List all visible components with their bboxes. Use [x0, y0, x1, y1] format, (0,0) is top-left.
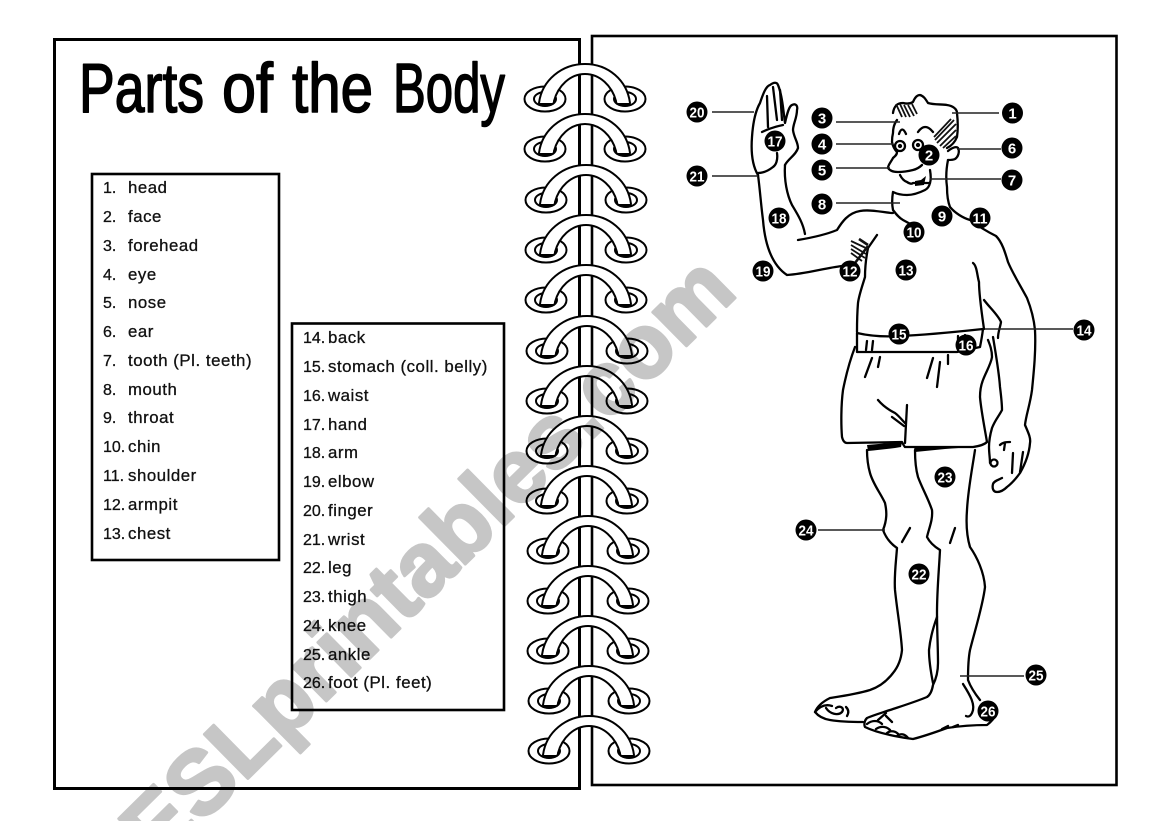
panel: vocabulary list 1 to 13: 1. [103, 180, 116, 197]
number badges: 26 [980, 704, 996, 720]
panel: vocabulary list 1 to 13: 4. [103, 267, 116, 284]
panel: vocabulary list 14 to 26: 25. [303, 647, 325, 664]
panel: vocabulary list 14 to 26: ankle [328, 645, 371, 664]
panel: vocabulary list 14 to 26: leg [328, 558, 352, 577]
panel: vocabulary list 14 to 26: 18. [303, 445, 325, 462]
panel: vocabulary list 1 to 13: 12. [103, 497, 125, 514]
panel: vocabulary list 1 to 13: 13. [103, 526, 125, 543]
panel: vocabulary list 14 to 26: 20. [303, 503, 325, 520]
panel: vocabulary list 1 to 13: face [128, 207, 162, 226]
toes [815, 705, 848, 716]
panel: vocabulary list 14 to 26: 17. [303, 417, 325, 434]
torso [857, 235, 877, 332]
title: of [222, 49, 273, 127]
panel: vocabulary list 14 to 26: knee [328, 616, 367, 635]
number badges: 25 [1028, 668, 1044, 684]
title: Body [393, 49, 505, 127]
panel: vocabulary list 1 to 13: 8. [103, 382, 116, 399]
number badges: 9 [938, 208, 946, 226]
title: the [292, 49, 373, 127]
raised arm [785, 165, 805, 234]
panel: vocabulary list 1 to 13: ear [128, 322, 154, 341]
panel: vocabulary list 14 to 26: 15. [303, 359, 325, 376]
panel: vocabulary list 14 to 26: wrist [327, 530, 365, 549]
panel: vocabulary list 14 to 26: 24. [303, 618, 325, 635]
raised hand [752, 83, 798, 175]
number badges: 17 [768, 134, 782, 150]
panel: vocabulary list 1 to 13: 7. [103, 353, 116, 370]
panel: vocabulary list 14 to 26: hand [328, 415, 368, 434]
panel: vocabulary list 14 to 26: thigh [328, 587, 367, 606]
leader lines [712, 112, 1073, 676]
number badges: 21 [690, 168, 704, 186]
panel: vocabulary list 1 to 13: head [128, 178, 168, 197]
panel: vocabulary list 1 to 13: 6. [103, 324, 116, 341]
panel: vocabulary list 1 to 13: mouth [128, 380, 177, 399]
panel: vocabulary list 1 to 13: 10. [103, 439, 125, 456]
panel: vocabulary list 1 to 13: tooth (Pl. teeth) [128, 351, 252, 370]
number badges: 20 [690, 104, 704, 122]
number badges: 23 [938, 470, 952, 486]
panel: vocabulary list 14 to 26: 23. [303, 589, 325, 606]
panel: vocabulary list 1 to 13: chin [128, 437, 161, 456]
number badges: 22 [912, 566, 926, 584]
panel: vocabulary list 1 to 13: chest [128, 524, 171, 543]
number badges: 10 [906, 224, 922, 242]
number badges: 1 [1008, 106, 1017, 122]
panel: vocabulary list 14 to 26: 19. [303, 474, 325, 491]
body illustration [752, 83, 1035, 739]
panel: vocabulary list 14 to 26: foot (Pl. feet) [328, 673, 432, 692]
number badges: 6 [1008, 140, 1016, 158]
panel: vocabulary list 1 to 13: 3. [103, 238, 116, 255]
panel: vocabulary list 1 to 13: nose [128, 293, 167, 312]
panel: vocabulary list 14 to 26: waist [327, 386, 369, 405]
panel: vocabulary list 1 to 13: shoulder [128, 466, 197, 485]
panel: vocabulary list 1 to 13: 5. [103, 295, 116, 312]
legs [815, 450, 902, 722]
number badges: 15 [892, 326, 906, 344]
neck, shoulder and lowered arm [946, 160, 1035, 492]
number badges: 24 [798, 522, 814, 540]
shorts [857, 329, 983, 352]
number badges: 19 [756, 264, 770, 280]
number badges: 18 [772, 210, 786, 228]
panel: vocabulary list 1 to 13: eye [128, 265, 157, 284]
ear [948, 147, 959, 160]
panel: vocabulary list 14 to 26: 26. [303, 675, 325, 692]
number badges: 7 [1008, 172, 1016, 190]
panel: vocabulary list 14 to 26: back [328, 328, 366, 347]
number badges: 16 [958, 338, 974, 354]
panel: vocabulary list 1 to 13: 11. [103, 468, 124, 485]
panel: vocabulary list 14 to 26: elbow [328, 472, 375, 491]
panel: vocabulary list 1 to 13: armpit [128, 495, 178, 514]
number badges: 13 [898, 262, 914, 280]
panel: vocabulary list 1 to 13: throat [128, 408, 174, 427]
panel: vocabulary list 14 to 26: 22. [303, 560, 325, 577]
panel: vocabulary list 14 to 26: 14. [303, 330, 325, 347]
panel: vocabulary list 1 to 13: 9. [103, 410, 116, 427]
panel: vocabulary list 1 to 13 [92, 174, 279, 560]
number badges [686, 102, 1094, 722]
notebook spiral binding [524, 64, 650, 764]
panel: left notebook page [54, 40, 580, 788]
number badges: 12 [842, 264, 858, 280]
panel: vocabulary list 14 to 26: arm [328, 443, 359, 462]
number badges: 14 [1076, 322, 1092, 340]
title [79, 49, 505, 127]
head and hair [893, 95, 958, 148]
panel: vocabulary list 1 to 13: forehead [128, 236, 199, 255]
title: Parts [79, 49, 204, 127]
icon: leg hem shadows and hatching [851, 104, 972, 452]
number badges: 3 [818, 110, 826, 128]
panel: vocabulary list 14 to 26 [292, 324, 504, 710]
panel: vocabulary list 14 to 26: finger [328, 501, 373, 520]
panel: vocabulary list 14 to 26: stomach (coll. belly) [328, 357, 488, 376]
panel: vocabulary list 14 to 26: 21. [303, 532, 325, 549]
number badges: 11 [972, 210, 988, 228]
number badges: 5 [818, 162, 826, 180]
panel: vocabulary list 14 to 26: 16. [303, 388, 325, 405]
number badges: 8 [818, 196, 826, 214]
panel: vocabulary list 1 to 13: 2. [103, 209, 116, 226]
number badges: 4 [818, 136, 827, 154]
panel: right notebook page [592, 36, 1116, 785]
number badges: 2 [925, 148, 933, 164]
